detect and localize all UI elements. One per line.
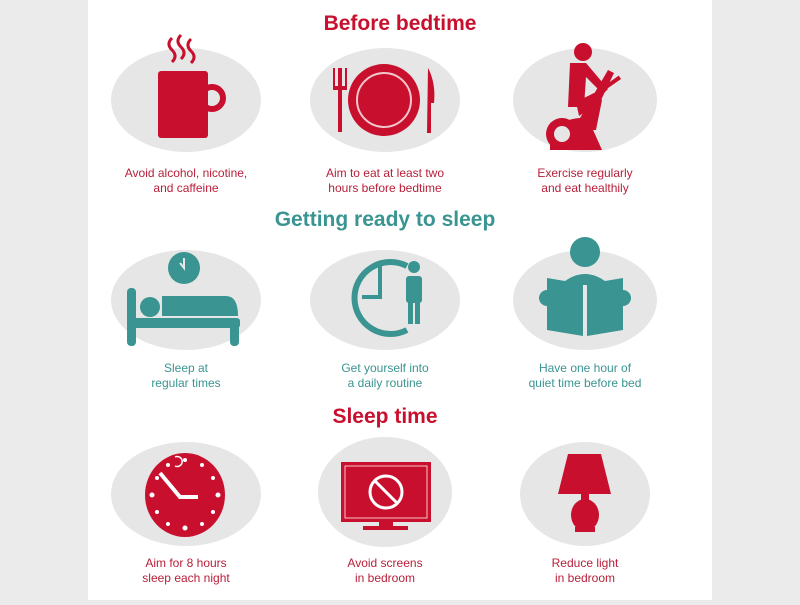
caption: Aim to eat at least two bbox=[326, 166, 444, 180]
panel: avoid screens bbox=[318, 437, 452, 585]
panel: avoid alcohol bbox=[111, 35, 261, 195]
caption: Aim for 8 hours bbox=[145, 556, 227, 570]
caption: Get yourself into bbox=[341, 361, 429, 375]
title: Getting ready to sleep: Getting ready to sleep bbox=[275, 208, 495, 231]
panel: quiet time bbox=[513, 237, 657, 390]
panel: 8 hours: sleep each night bbox=[142, 571, 230, 585]
panel: 8 hours bbox=[111, 442, 261, 585]
caption: Avoid screens bbox=[347, 556, 423, 570]
caption: Sleep at bbox=[164, 361, 209, 375]
panel: sleep at regular times: regular times bbox=[151, 376, 221, 390]
icon: bed and clock bbox=[127, 252, 240, 346]
panel: eat early bbox=[310, 48, 460, 195]
icon: mug bbox=[158, 35, 223, 138]
title: Sleep time: Sleep time bbox=[332, 405, 438, 428]
panel: sleep at regular times bbox=[111, 250, 261, 390]
icon: clock and person bbox=[355, 261, 422, 334]
title: Before bedtime: Before bedtime bbox=[324, 12, 476, 35]
panel: exercise: and eat healthily bbox=[541, 181, 629, 195]
icon: night clock bbox=[145, 453, 225, 537]
panel: daily routine bbox=[310, 250, 460, 390]
icon: reading person bbox=[539, 237, 631, 336]
panel: reduce light: in bedroom bbox=[555, 571, 615, 585]
caption: Avoid alcohol, nicotine, bbox=[125, 166, 247, 180]
panel: eat early: hours before bedtime bbox=[328, 181, 442, 195]
caption: Exercise regularly bbox=[537, 166, 633, 180]
caption: Reduce light bbox=[552, 556, 619, 570]
panel: reduce light bbox=[520, 442, 650, 585]
icon: exercise bike bbox=[546, 43, 621, 150]
panel: avoid alcohol: and caffeine bbox=[153, 181, 219, 195]
icon: lamp bbox=[558, 454, 611, 532]
panel: exercise bbox=[513, 43, 657, 195]
caption: Have one hour of bbox=[539, 361, 632, 375]
icon: plate bbox=[333, 64, 434, 136]
panel: avoid screens: in bedroom bbox=[355, 571, 415, 585]
panel: quiet time: quiet time before bed bbox=[529, 376, 641, 390]
icon: tv with no sign bbox=[341, 462, 431, 530]
panel: daily routine: a daily routine bbox=[348, 376, 423, 390]
